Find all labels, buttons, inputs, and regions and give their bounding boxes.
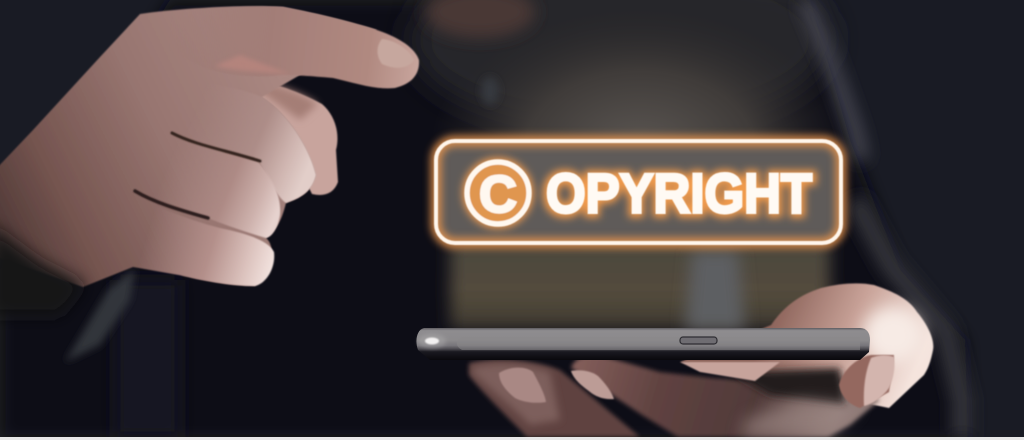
phone lens flare [425,338,439,344]
word: COPYRIGHT: OPYRIGHT [546,162,812,224]
finger creases [135,133,260,218]
phone side inset [457,337,860,350]
glow beneath badge [450,240,830,330]
phone body [416,328,870,360]
phone [416,328,870,360]
fingernail [378,39,414,68]
lower right light [740,400,860,437]
thumb [839,355,894,408]
cuff under pointing hand [65,268,135,362]
holding hand [469,283,933,437]
pink palm sliver [680,362,780,381]
finger shadow [730,368,845,405]
upper shirt tone [410,0,830,130]
main fingernail [571,370,614,399]
fourth finger [120,192,274,286]
thumbnail [864,355,895,406]
phone button [680,337,717,344]
shirt button [481,77,499,105]
rear finger shade [240,78,318,120]
badge backdrop [437,142,840,242]
navy drape [115,280,180,437]
left finger tip light [472,364,560,425]
pointing hand [0,6,419,315]
phone end highlight [418,334,446,348]
hand silhouette [0,6,377,287]
left fingernail [499,368,546,403]
collar highlights [805,0,862,160]
palm highlight [863,307,923,363]
index finger underside blush [215,55,290,74]
second finger [170,80,316,203]
main finger and heel of hand [571,355,880,437]
third finger [140,133,280,238]
copyright symbol [467,162,529,224]
badge glow [436,141,841,243]
rear finger [225,76,338,195]
index finger [170,6,419,88]
sleeve highlight [855,200,962,437]
bottom strip [0,437,1024,440]
badge [436,141,841,243]
left finger [469,360,640,437]
badge outline [436,141,841,243]
lit shirt centre [430,5,850,295]
symbol and word glow: OPYRIGHT [545,162,813,225]
copyright symbol: C [479,166,517,224]
palm behind phone [680,283,933,408]
wrist fade [0,225,85,315]
chin [425,0,535,38]
